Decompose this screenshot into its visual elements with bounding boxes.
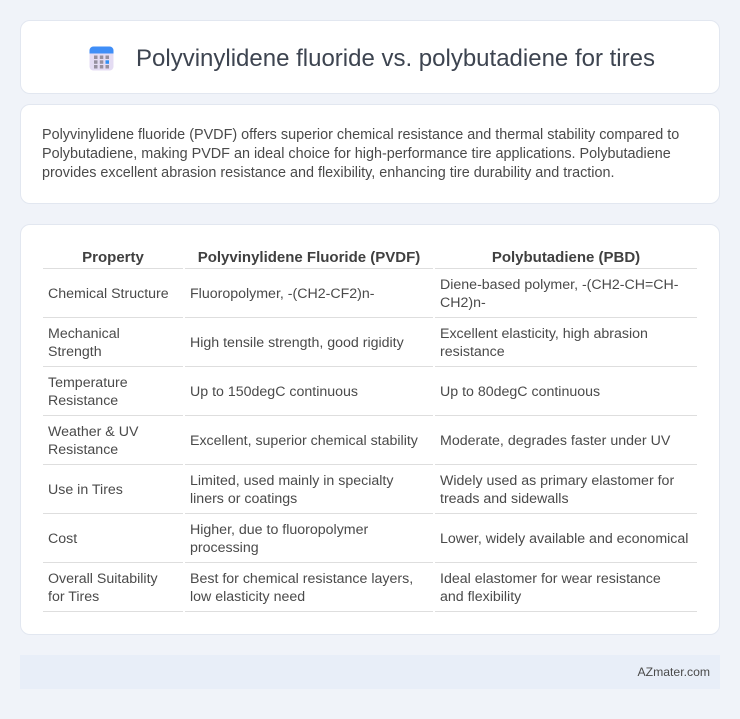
- table rows: Overall Suitability: [48, 570, 158, 586]
- table rows: Lower, widely available and economical: [440, 530, 688, 546]
- table rows: Use in Tires: [48, 482, 123, 498]
- table rows: High tensile strength, good rigidity: [190, 334, 404, 350]
- table rows: Cost: [48, 530, 77, 546]
- intro text: Polybutadiene, making PVDF an ideal choice for high-performance tire applications. Polybutadiene: [42, 146, 671, 162]
- footer bar: [20, 655, 720, 689]
- table rows: Mechanical: [48, 326, 120, 342]
- title: Polyvinylidene fluoride vs. polybutadiene for tires: [136, 45, 655, 72]
- table rows: Chemical Structure: [48, 286, 169, 302]
- table rows: Strength: [48, 344, 102, 360]
- table rows: low elasticity need: [190, 588, 305, 604]
- table rows: Up to 80degC continuous: [440, 384, 600, 400]
- intro text: provides excellent abrasion resistance and flexibility, enhancing tire durability and traction.: [42, 165, 614, 181]
- comparison table: [43, 249, 697, 612]
- table rows: Resistance: [48, 442, 118, 458]
- table rows: Excellent, superior chemical stability: [190, 432, 418, 448]
- table rows: treads and sidewalls: [440, 490, 569, 506]
- table rows: Best for chemical resistance layers,: [190, 570, 413, 586]
- table rows: processing: [190, 540, 259, 556]
- table rows: Moderate, degrades faster under UV: [440, 432, 670, 448]
- table rows: Widely used as primary elastomer for: [440, 472, 674, 488]
- table rows: resistance: [440, 344, 505, 360]
- table header: Polyvinylidene Fluoride (PVDF): [198, 249, 420, 266]
- table rows: liners or coatings: [190, 490, 297, 506]
- table rows: Fluoropolymer, -(CH2-CF2)n-: [190, 286, 374, 302]
- table rows: and flexibility: [440, 588, 521, 604]
- intro text: Polyvinylidene fluoride (PVDF) offers superior chemical resistance and thermal stability compared to: [42, 126, 679, 142]
- table rows: for Tires: [48, 588, 99, 604]
- table header: Property: [82, 249, 144, 266]
- intro text: [42, 126, 679, 181]
- header panel: [20, 20, 720, 94]
- table header: [82, 249, 640, 266]
- table rows: Excellent elasticity, high abrasion: [440, 326, 648, 342]
- table panel: [20, 224, 720, 635]
- table rows: Temperature: [48, 374, 128, 390]
- table rows: Weather & UV: [48, 424, 138, 440]
- table rows: Diene-based polymer, -(CH2-CH=CH-: [440, 276, 678, 292]
- footer credit: AZmater.com: [638, 665, 710, 679]
- table rows: Higher, due to fluoropolymer: [190, 522, 368, 538]
- icon: calendar: [90, 46, 114, 70]
- table header: Polybutadiene (PBD): [492, 249, 640, 266]
- table rows: Limited, used mainly in specialty: [190, 472, 393, 488]
- table rows: Up to 150degC continuous: [190, 384, 358, 400]
- table rows: Ideal elastomer for wear resistance: [440, 570, 661, 586]
- table rows: CH2)n-: [440, 294, 486, 310]
- intro panel: [20, 104, 720, 204]
- table rows: Resistance: [48, 392, 118, 408]
